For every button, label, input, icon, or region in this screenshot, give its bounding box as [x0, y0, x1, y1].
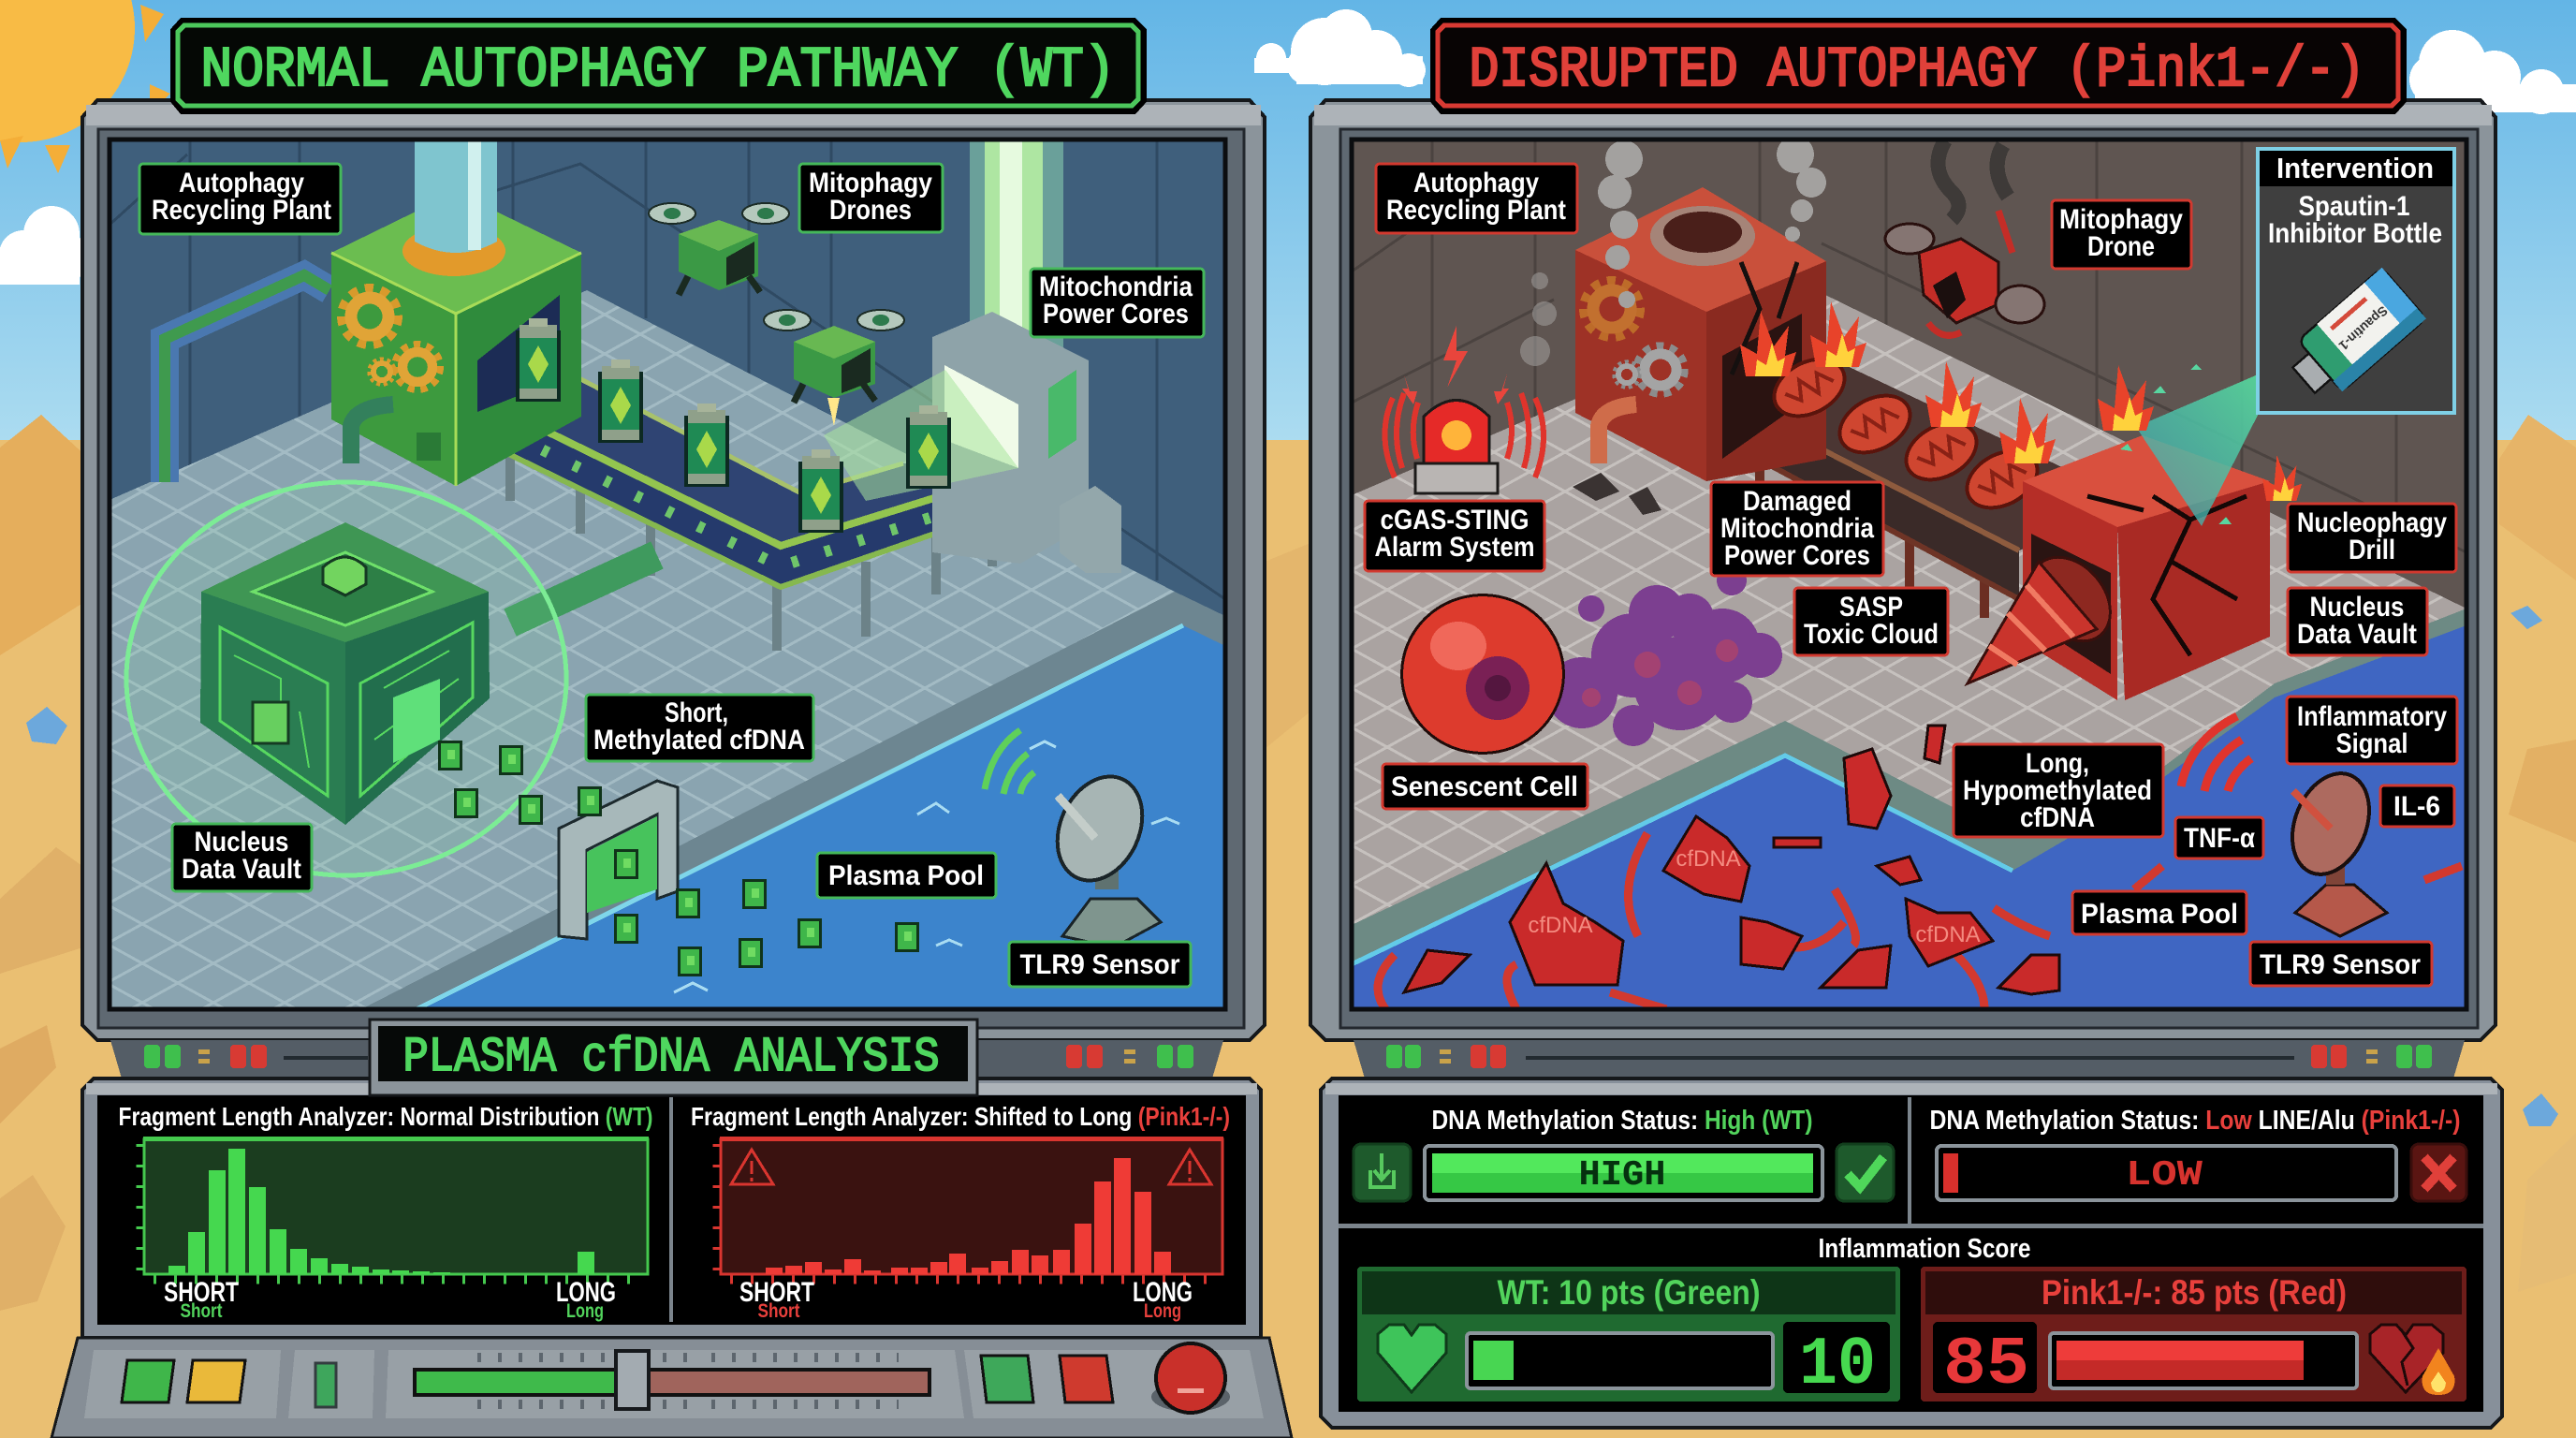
control buttons: [122, 1343, 1230, 1413]
bar: 10: [1467, 1333, 1773, 1388]
chart: WT fragment length: Long: [566, 1300, 604, 1322]
text: Spautin-1: Spautin-1: [2299, 191, 2409, 222]
label: TNF-α: TNF-α: [2184, 823, 2255, 854]
label: Senescent Cell: Senescent Cell: [1391, 771, 1578, 802]
panel: control deck: [51, 1338, 1292, 1438]
glass tube: [415, 139, 497, 253]
icon: cGAS-STING alarm: [1384, 326, 1544, 493]
label: cGAS-STING Alarm System: cGAS-STING: [1380, 505, 1530, 536]
label: Nucleophagy Drill: [2288, 504, 2456, 572]
label: IL-6: IL-6: [2393, 791, 2440, 822]
power core batteries: [516, 318, 951, 533]
label: Nucleus Data Vault: Nucleus: [2310, 592, 2404, 623]
label: Mitochondria Power Cores: Power Cores: [1043, 299, 1189, 330]
label: IL-6: [2380, 785, 2454, 827]
scene: damaged factory: [1352, 136, 2466, 1009]
chart: WT fragment length: [118, 1102, 653, 1322]
chart: Pink1 fragment length: Fragment Length Analyzer: Shifted to Long (Pink1-/-): [691, 1102, 1230, 1131]
label: Mitochondria Power Cores: Mitochondria: [1039, 271, 1193, 302]
short methylated cfDNA fragments: [438, 741, 919, 976]
label: Autophagy Recycling Plant: [139, 164, 341, 234]
icon: download: [1354, 1144, 1411, 1201]
label: Mitochondria Power Cores: [1031, 269, 1204, 337]
cfDNA blob labels: cfDNA: [1676, 846, 1741, 872]
cfDNA blobs: [1404, 726, 2059, 994]
mitochondria power core gate: [824, 139, 1121, 573]
label: TLR9 Sensor: TLR9 Sensor: [2260, 949, 2421, 980]
label: Mitophagy Drone: Mitophagy: [2059, 204, 2183, 235]
plasma pool water: [1352, 625, 2466, 1009]
icon: damaged drone: [1885, 211, 2044, 335]
label: Autophagy Recycling Plant: Autophagy: [1413, 168, 1539, 198]
label: TLR9 Sensor: [2250, 942, 2432, 986]
label: cGAS-STING Alarm System: [1365, 501, 1544, 571]
label: Mitophagy Drones: [799, 164, 943, 232]
label: Autophagy Recycling Plant: Recycling Plant: [152, 195, 331, 226]
label: Inflammatory Signal: Inflammatory: [2297, 701, 2447, 732]
slider: [415, 1351, 929, 1409]
label: Long, Hypomethylated cfDNA: Hypomethylated: [1963, 775, 2152, 806]
icon: inhibitor bottle: [2282, 268, 2426, 405]
icon: mitophagy drones: [649, 203, 904, 426]
bar: high: HIGH: [1578, 1155, 1666, 1196]
bar: 85: [2050, 1333, 2357, 1388]
label: Damaged Mitochondria Power Cores: Mitochondria: [1720, 513, 1874, 544]
label: Nucleus Data Vault: [2288, 588, 2427, 655]
nucleus vault and drill: [1968, 435, 2270, 700]
label: Mitophagy Drone: Drone: [2087, 231, 2155, 262]
icon: TLR9 dish inflamed: [2181, 716, 2387, 936]
status: Pink1 methylation low: DNA Methylation Status: Low LINE/Alu (Pink1-/-): [1930, 1106, 2460, 1136]
heading: inflammation score: Inflammation Score: [1818, 1234, 2031, 1264]
label: Nucleus Data Vault: [172, 824, 312, 891]
label: Nucleus Data Vault: Nucleus: [195, 827, 288, 858]
nucleus data vault cube: [200, 522, 490, 825]
icon: blue rocks: [26, 606, 2558, 1126]
LED strip: left: [110, 1040, 1223, 1078]
conveyor with damage: [1723, 356, 2144, 618]
score card: WT: WT: 10 pts (Green): [1498, 1273, 1760, 1312]
bar: low: LOW: [2126, 1155, 2203, 1196]
dark drone smoke: [1938, 140, 2008, 220]
cfDNA blob labels: cfDNA: [1915, 922, 1981, 947]
bar: low: [1937, 1146, 2396, 1200]
label: Damaged Mitochondria Power Cores: [1711, 482, 1883, 576]
label: Autophagy Recycling Plant: Autophagy: [179, 168, 304, 198]
label: Inflammatory Signal: Signal: [2336, 728, 2408, 759]
scene: healthy factory: [110, 139, 1225, 1009]
label: Plasma Pool: [2072, 891, 2247, 934]
plasma pool water: [417, 625, 1225, 1009]
chart: WT fragment length: Short: [180, 1300, 223, 1322]
panel: normal pathway monitor: [82, 100, 1265, 1040]
label: Damaged Mitochondria Power Cores: Damaged: [1743, 486, 1852, 517]
text: Inhibitor Bottle: Inhibitor Bottle: [2268, 218, 2442, 249]
label: Long, Hypomethylated cfDNA: cfDNA: [2020, 802, 2095, 833]
label: Mitophagy Drones: Drones: [829, 195, 912, 226]
labels: WT scene: [139, 164, 1204, 987]
label: Short, Methylated cfDNA: Methylated cfDNA: [593, 725, 805, 756]
pipes: [165, 275, 329, 482]
panel: fragment length analyzer: [82, 1078, 1261, 1338]
label: Inflammatory Signal: [2287, 697, 2457, 764]
title: disrupted autophagy: DISRUPTED AUTOPHAGY (Pink1-/-): [1470, 39, 2364, 103]
pool ledge: [361, 592, 1225, 1009]
panel: intervention: [2258, 149, 2454, 413]
damaged mitochondria: [1762, 345, 2050, 521]
icon: green heart: [1378, 1325, 1446, 1392]
bar: high: [1425, 1146, 1822, 1200]
score: 10: 10: [1799, 1327, 1876, 1403]
label: TLR9 Sensor: [1009, 942, 1191, 987]
icon: warning triangles: [731, 1150, 1211, 1184]
icon: sun: [0, 0, 170, 178]
nucleus vault shield: [126, 482, 566, 875]
panel: disrupted pathway monitor: [1310, 100, 2496, 1040]
chart: Pink1 fragment length: [691, 1102, 1230, 1322]
plasma gate: [559, 781, 678, 939]
connector pipe to vault: [510, 555, 657, 623]
cfDNA blob labels: [1528, 846, 1981, 947]
smoke plumes: [1520, 136, 1826, 366]
title: disrupted autophagy: [1432, 20, 2405, 112]
chart: Pink1 fragment length: LONG: [1133, 1277, 1193, 1308]
text: intervention heading: Intervention: [2276, 152, 2434, 184]
chart: Pink1 fragment length: SHORT: [739, 1277, 814, 1308]
label: Plasma Pool: Plasma Pool: [828, 860, 984, 891]
fires: [1740, 301, 2056, 463]
background: sky: [0, 0, 2576, 445]
label: Autophagy Recycling Plant: Recycling Plant: [1386, 195, 1566, 226]
label: Plasma Pool: [817, 853, 996, 898]
labels: Pink1 scene: [1365, 164, 2457, 986]
chart: Pink1 fragment length: Long: [1144, 1300, 1181, 1322]
label: Damaged Mitochondria Power Cores: Power Cores: [1724, 540, 1870, 571]
orange tube ring: [402, 234, 505, 276]
label: Short, Methylated cfDNA: [586, 695, 813, 761]
pool ledge: [1352, 609, 2466, 964]
label: Plasma Pool: Plasma Pool: [2081, 899, 2238, 930]
title: normal autophagy pathway: [172, 20, 1145, 112]
label: Nucleus Data Vault: Data Vault: [2297, 619, 2417, 650]
icon: TLR9 dish: [985, 730, 1161, 947]
monitor bezel: [82, 100, 1265, 1040]
conveyor belt: [505, 376, 997, 651]
icon: inhibitor bottle: Spautin-1: [2336, 303, 2391, 354]
label: TNF-α: [2175, 817, 2263, 858]
background: desert sand: [0, 415, 2576, 1438]
label: TLR9 Sensor: TLR9 Sensor: [1020, 949, 1180, 980]
label: Long, Hypomethylated cfDNA: [1954, 744, 2163, 837]
label: Long, Hypomethylated cfDNA: Long,: [2026, 748, 2089, 779]
label: SASP Toxic Cloud: [1794, 588, 1948, 655]
floor tiles: [110, 290, 1175, 1009]
heading: plasma cfDNA analysis: PLASMA cfDNA ANALYSIS: [402, 1030, 940, 1085]
senescent cell: [1400, 594, 1565, 755]
label: SASP Toxic Cloud: SASP: [1839, 592, 1903, 623]
score card: Pink1: [1921, 1267, 2466, 1403]
chart: Pink1 fragment length: Short: [758, 1300, 800, 1322]
icon: X: [2411, 1144, 2466, 1201]
score card: Pink1: Pink1-/-: 85 pts (Red): [2042, 1273, 2347, 1312]
title: normal autophagy pathway: NORMAL AUTOPHAGY PATHWAY (WT): [200, 39, 1116, 103]
chart: WT fragment length: LONG: [556, 1277, 616, 1308]
panel: methylation and inflammation: [1321, 1078, 2502, 1428]
label: Short, Methylated cfDNA: Short,: [665, 697, 728, 728]
label: SASP Toxic Cloud: Toxic Cloud: [1804, 619, 1939, 650]
burnt recycling plant: [1573, 187, 1826, 515]
heading: plasma cfDNA analysis: [370, 1020, 977, 1095]
cfDNA blob labels: cfDNA: [1528, 913, 1593, 938]
label: Autophagy Recycling Plant: [1376, 164, 1577, 233]
chart: WT fragment length: SHORT: [164, 1277, 239, 1308]
SASP toxic cloud: [1546, 565, 1782, 746]
icon: broken heart with flame: [2370, 1325, 2454, 1395]
label: Mitophagy Drones: Mitophagy: [809, 168, 932, 198]
status: Pink1 methylation low: [1930, 1106, 2466, 1201]
label: Nucleophagy Drill: Drill: [2349, 535, 2395, 565]
icon: spray: [2098, 363, 2302, 526]
score card: WT: [1357, 1267, 1900, 1403]
score: 85: 85: [1943, 1327, 2029, 1403]
monitor bezel: [1310, 100, 2496, 1040]
label: Nucleus Data Vault: Data Vault: [182, 854, 301, 885]
chart: WT fragment length: Fragment Length Analyzer: Normal Distribution (WT): [118, 1102, 653, 1131]
label: cGAS-STING Alarm System: Alarm System: [1374, 532, 1535, 563]
label: Mitophagy Drone: [2052, 200, 2191, 269]
status: WT methylation high: [1354, 1106, 1894, 1201]
floor tiles: [1352, 293, 2466, 1009]
icon: check: [1837, 1144, 1894, 1201]
LED strip: right: [1354, 1040, 2465, 1078]
label: Senescent Cell: [1383, 764, 1588, 809]
status: WT methylation high: DNA Methylation Status: High (WT): [1432, 1106, 1812, 1136]
recycling plant: [331, 139, 581, 486]
icon: clouds: [0, 9, 2576, 285]
label: Nucleophagy Drill: Nucleophagy: [2297, 507, 2447, 538]
